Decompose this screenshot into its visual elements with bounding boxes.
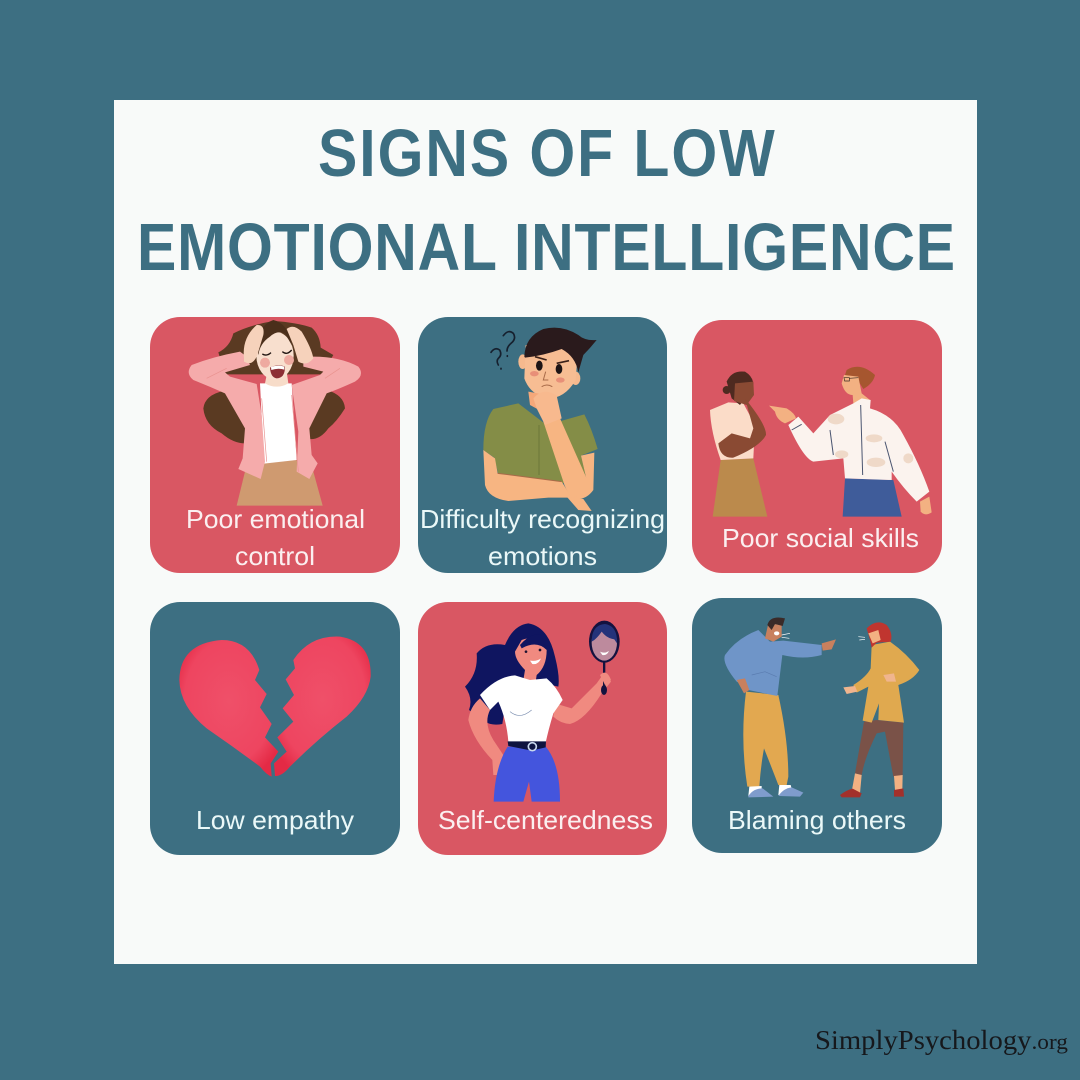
white content panel [114,100,977,964]
label [420,504,665,571]
label: control [235,541,315,571]
panel: difficulty recognizing emotions [418,317,667,573]
panel: poor emotional control [150,317,400,573]
illustration: man and woman arguing [724,617,919,797]
panel: blaming others [692,598,942,853]
illustration: woman with mirror [465,621,620,802]
label: Poor emotional [186,504,365,534]
title: SIGNS OF LOW [318,117,775,191]
label: Poor social skills [722,523,919,553]
label: Low empathy [196,805,354,835]
illustration: thinking man [483,328,598,511]
icon: hand mirror [589,621,620,695]
label [186,504,365,571]
illustration: stressed woman [189,320,361,506]
icon: broken heart [179,637,371,777]
panel: poor social skills [692,320,942,573]
label: emotions [488,541,597,571]
title: EMOTIONAL INTELLIGENCE [137,211,955,285]
icon: question marks [491,332,515,369]
illustration: man pointing at woman [710,367,932,517]
label: Difficulty recognizing [420,504,665,534]
label: Self-centeredness [438,805,653,835]
panel: self-centeredness [418,602,667,855]
source credit: SimplyPsychology .org [815,1025,1068,1055]
title [137,117,955,285]
panel: low empathy [150,602,400,855]
label: Blaming others [728,805,906,835]
